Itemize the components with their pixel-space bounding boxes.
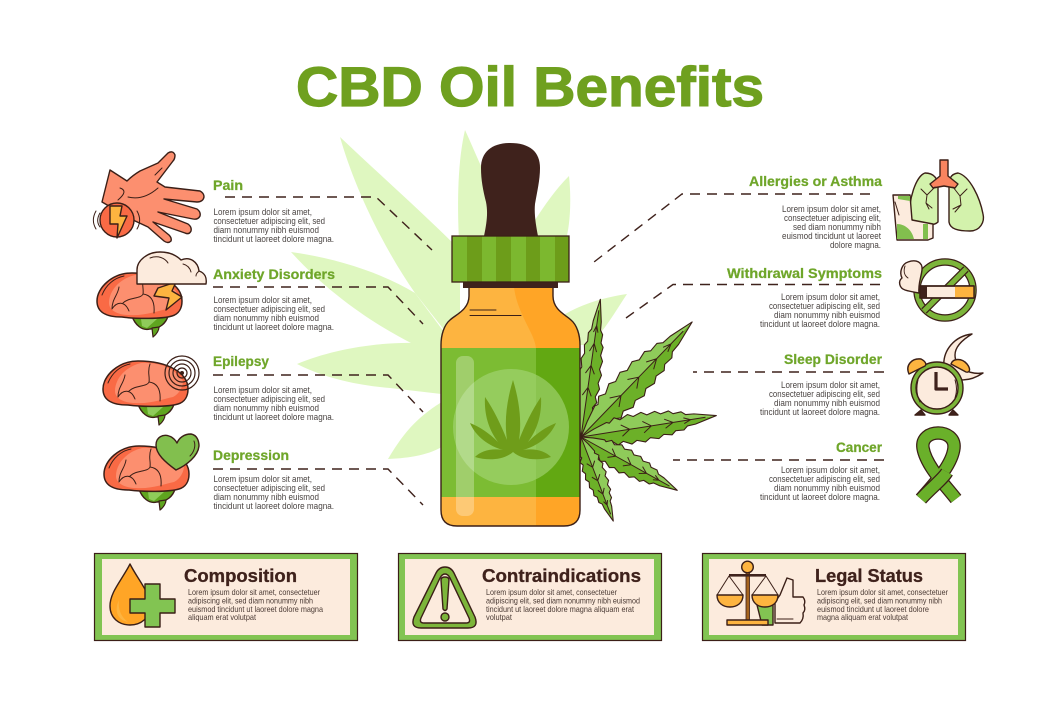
text: cancer: tincidunt ut laoreet dolore magna. [760,492,880,502]
heading: allergies or asthma: Allergies or Asthma [749,173,882,189]
connector: sleep [693,371,884,373]
text: anxiety [214,295,334,332]
text: Lorem ipsum dolor sit amet, consectetuer [486,587,617,597]
text: pain: tincidunt ut laoreet dolore magna. [214,234,334,244]
text: allergies: sed diam nonummy nibh [793,222,881,232]
bottle highlight [456,356,474,516]
text: pain: diam nonummy nibh euismod [214,225,319,235]
text: pain [214,207,334,244]
heading: withdrawal symptoms: Withdrawal Symptoms [727,265,882,281]
cap [452,236,569,282]
text [817,587,948,622]
panel: composition [94,554,358,640]
real cannabis leaf [569,298,719,525]
text: Lorem ipsum dolor sit amet, consectetuer [817,587,948,597]
text: anxiety: Lorem ipsum dolor sit amet, [214,295,312,305]
text: allergies: dolore magna. [830,240,881,250]
label leaf icon [470,380,556,459]
icon: brain with seizure rings [103,356,199,425]
text: depression: tincidunt ut laoreet dolore magna. [214,501,334,511]
text: anxiety: consectetuer adipiscing elit, sed [214,304,325,314]
text: Lorem ipsum dolor sit amet, consectetuer [188,587,320,597]
text: cancer: Lorem ipsum dolor sit amet, [781,465,880,475]
title: CBD Oil Benefits [296,55,764,118]
text: euismod tincidunt ut laoreet dolore magna [188,604,323,614]
text: sleep [760,380,880,417]
icon: hand with pain [93,152,204,242]
text: cancer: consectetuer adipiscing elit, sed [769,474,880,484]
connector: withdrawal [626,284,880,318]
text: volutpat [486,612,513,622]
text: withdrawal: tincidunt ut laoreet dolore magna. [760,319,880,329]
text: withdrawal: consectetuer adipiscing elit, sed [769,301,880,311]
text: tincidunt ut laoreet dolore magna aliquam erat [486,604,635,614]
background cannabis leaf [291,130,627,459]
text: depression [214,474,334,511]
neck highlight lines [470,310,521,316]
text: sleep: consectetuer adipiscing elit, sed [769,389,880,399]
heading: anxiety disorders: Anxiety Disorders [213,266,335,282]
bottle body [441,287,580,526]
label circle [453,369,569,485]
text: euismod tincidunt ut laoreet dolore [817,604,929,614]
heading: depression: Depression [213,447,289,463]
text [188,587,323,622]
text: adipiscing elit, sed diam nonummy nibh [817,596,942,606]
text: epilepsy: tincidunt ut laoreet dolore magna. [214,412,334,422]
connector: pain [225,197,432,250]
text: sleep: Lorem ipsum dolor sit amet, [781,380,880,390]
text: epilepsy: diam nonummy nibh euismod [214,403,319,413]
text: aliquam erat volutpat [188,612,257,622]
dropper bulb [481,143,540,236]
heading: cancer: Cancer [836,439,883,455]
bottle outline [441,287,580,526]
text: depression: Lorem ipsum dolor sit amet, [214,474,312,484]
text: adipiscing elit, sed diam nonummy nibh [188,596,313,606]
text: epilepsy: consectetuer adipiscing elit, sed [214,394,325,404]
icon: alarm clock and moon [908,334,983,415]
text: sleep: tincidunt ut laoreet dolore magna. [760,407,880,417]
icon: warning triangle [413,567,476,628]
text: allergies [782,204,881,250]
heading: Composition [184,566,297,586]
panel: legal status [702,554,966,640]
heading: pain: Pain [213,177,243,193]
icon: brain with heart [104,434,199,510]
connector: anxiety [213,287,423,324]
text: allergies: Lorem ipsum dolor sit amet, [782,204,881,214]
icon: oil drop with plus [110,564,175,627]
icon: awareness ribbon [921,433,956,499]
text [486,587,640,622]
connector: cancer [673,459,884,461]
text: pain: consectetuer adipiscing elit, sed [214,216,325,226]
connector: allergies [594,194,870,262]
text: cancer [760,465,880,502]
heading: epilepsy: Epilepsy [213,353,269,369]
label [441,348,580,497]
heading: Contraindications [482,566,641,586]
text: depression: diam nonummy nibh euismod [214,492,319,502]
icon: lungs and inhaler [893,160,983,240]
text: magna aliquam erat volutpat [817,612,909,622]
text: allergies: euismod tincidunt ut laoreet [782,231,881,241]
bottle [441,143,580,526]
text: cancer: diam nonummy nibh euismod [774,483,880,493]
text: sleep: diam nonummy nibh euismod [774,398,880,408]
icon: brain with storm cloud [97,252,206,337]
pain circle [100,203,134,237]
icon: scales and thumbs up [717,561,805,625]
text: anxiety: tincidunt ut laoreet dolore magna. [214,322,334,332]
text: epilepsy [214,385,334,422]
heading: Legal Status [815,566,923,586]
connector: depression [213,469,423,505]
panel: contraindications [398,554,662,640]
collar band [463,282,558,288]
text: withdrawal: Lorem ipsum dolor sit amet, [781,292,880,302]
connector: epilepsy [213,375,423,412]
text: adipiscing elit, sed diam nonummy nibh euismod [486,596,640,606]
icon: no smoking [900,261,974,318]
text: epilepsy: Lorem ipsum dolor sit amet, [214,385,312,395]
text: depression: consectetuer adipiscing elit, sed [214,483,325,493]
text: withdrawal: diam nonummy nibh euismod [774,310,880,320]
text: pain: Lorem ipsum dolor sit amet, [214,207,312,217]
text: withdrawal [760,292,880,329]
heading: sleep disorder: Sleep Disorder [784,351,883,367]
text: anxiety: diam nonummy nibh euismod [214,313,319,323]
text: allergies: consectetuer adipiscing elit, [784,213,881,223]
